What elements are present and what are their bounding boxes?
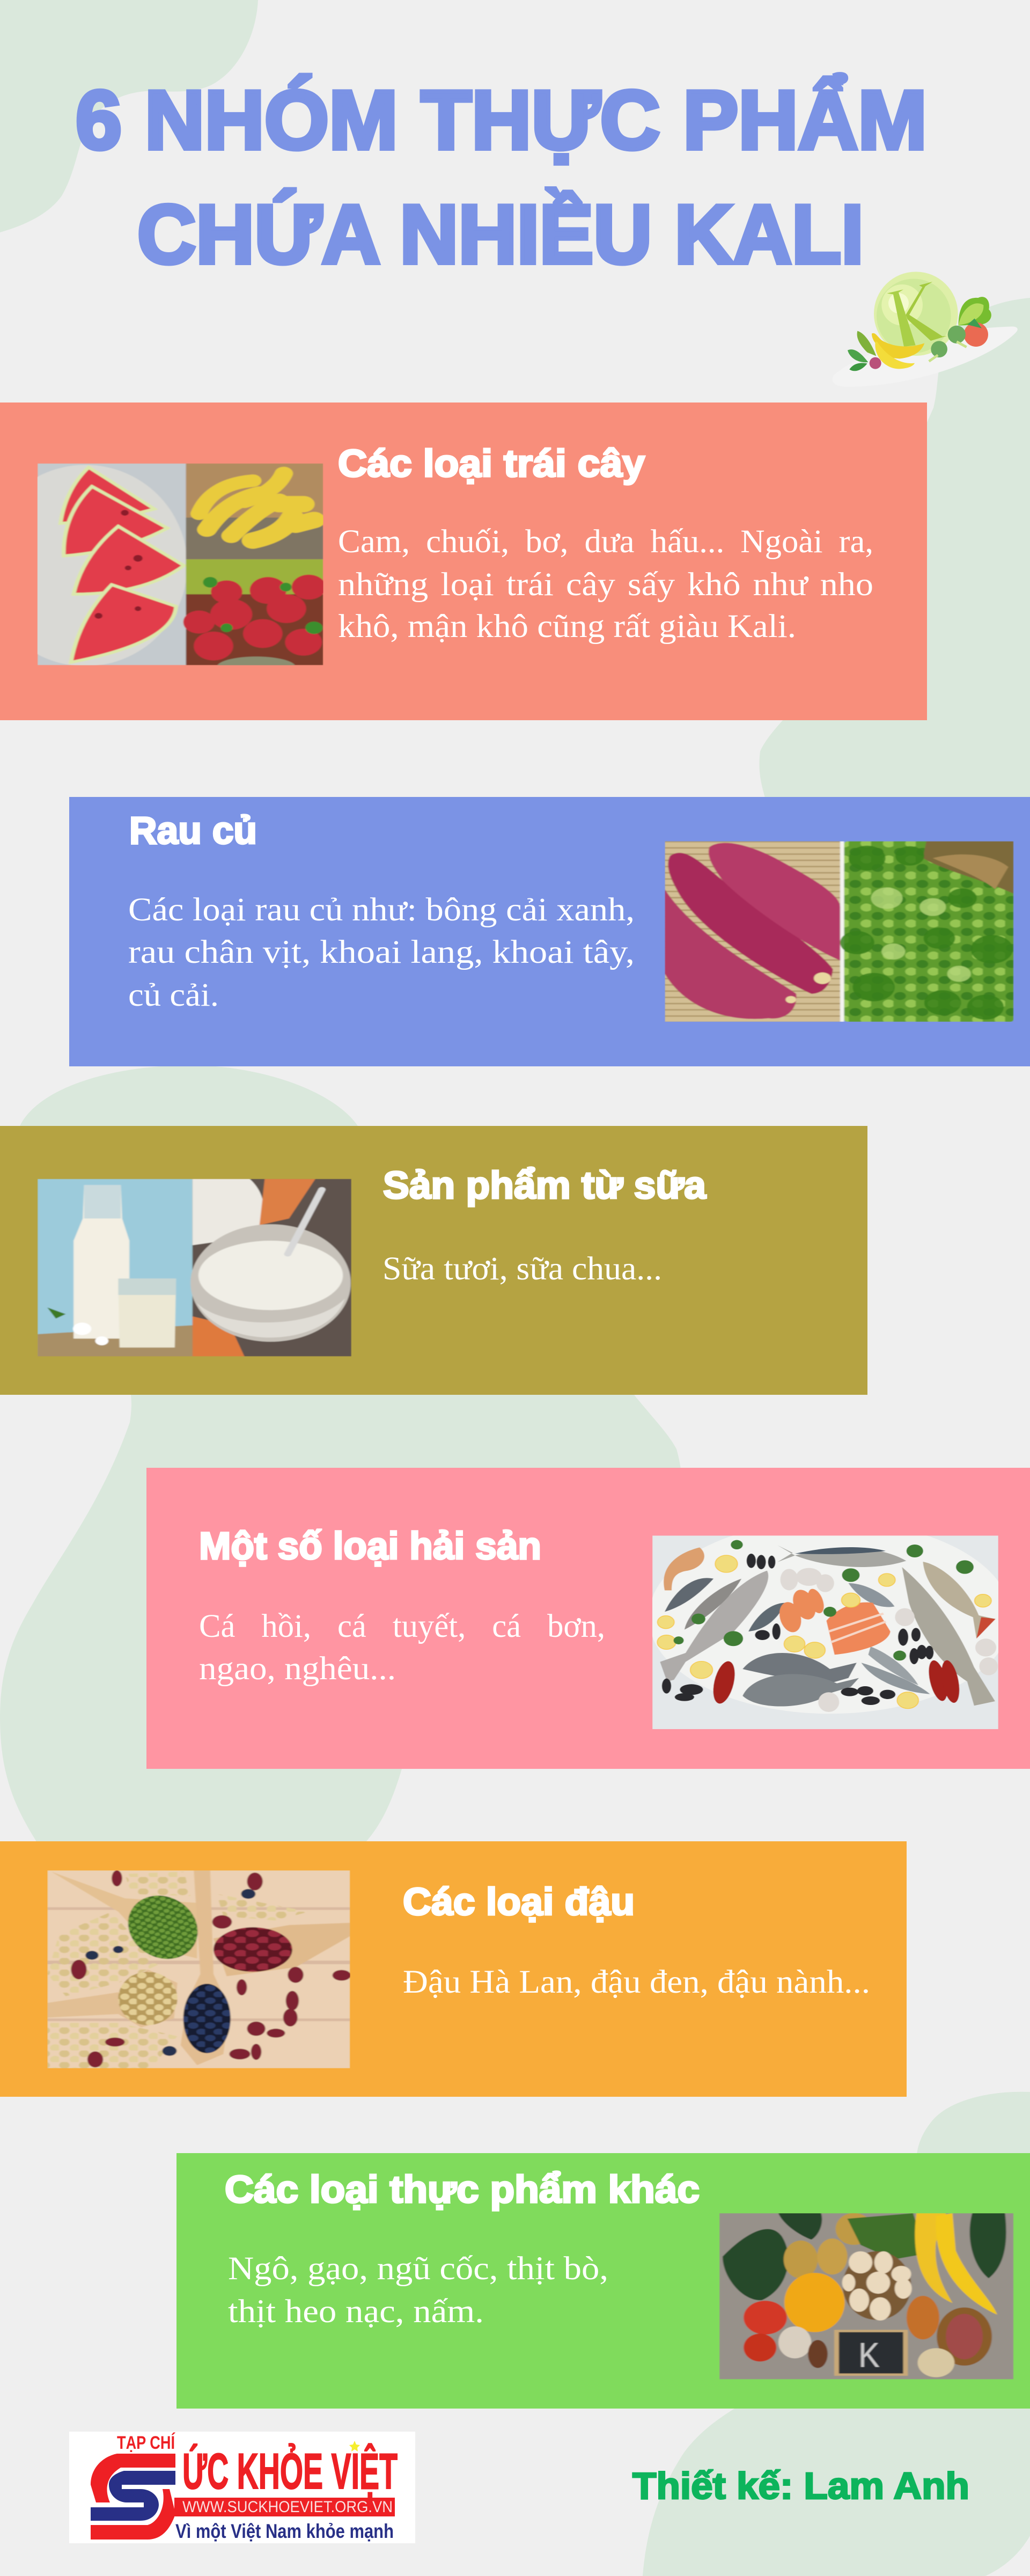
panel: other foods	[176, 2153, 1030, 2409]
photo: beans in wooden spoons	[47, 1870, 351, 2068]
designer credit: Thiết kế: Lam Anh	[632, 2465, 969, 2507]
photo: potassium-rich foods: K	[858, 2336, 880, 2375]
title	[76, 74, 927, 281]
text block: Các loại rau củ như: bông cải xanh,	[128, 892, 635, 928]
panel: dairy	[0, 1126, 867, 1395]
logo: Tạp chí Sức Khỏe Việt: TẠP CHÍ	[117, 2433, 175, 2453]
photo: watermelon, banana, strawberry	[38, 464, 323, 665]
icon: potassium ball with vegetables on a plate	[833, 272, 1018, 387]
text block: Đậu Hà Lan, đậu đen, đậu nành...	[403, 1964, 870, 2000]
logo: Tạp chí Sức Khỏe Việt: ỨC KHỎE VIỆT	[182, 2443, 398, 2499]
title: 6 NHÓM THỰC PHẨM	[76, 74, 927, 166]
text block: Cá hồi, cá tuyết, cá bơn,	[199, 1608, 605, 1644]
photo: milk and yogurt	[38, 1179, 351, 1356]
text block	[128, 892, 635, 1013]
photo: sweet potato and broccoli	[665, 841, 1013, 1022]
text block	[199, 1608, 605, 1687]
text block: thịt heo nạc, nấm.	[228, 2294, 484, 2330]
text block	[338, 524, 873, 645]
text block: rau chân vịt, khoai lang, khoai tây,	[128, 934, 635, 970]
heading: Một số loại hải sản	[199, 1525, 541, 1568]
photo: fish and seafood	[652, 1535, 998, 1729]
heading: Sản phẩm từ sữa	[383, 1165, 707, 1207]
text block: ngao, nghêu...	[199, 1651, 396, 1687]
text block: những loại trái cây sấy khô như nho	[338, 567, 873, 603]
logo: Tạp chí Sức Khỏe Việt	[69, 2432, 415, 2543]
panel: seafood	[146, 1468, 1030, 1769]
text block: khô, mận khô cũng rất giàu Kali.	[338, 609, 796, 645]
logo: Tạp chí Sức Khỏe Việt: Vì một Việt Nam khỏe mạnh	[175, 2520, 394, 2542]
text block: Cam, chuối, bơ, dưa hấu... Ngoài ra,	[338, 524, 873, 560]
logo: Tạp chí Sức Khỏe Việt: WWW.SUCKHOEVIET.ORG.VN	[182, 2498, 393, 2516]
title: CHỨA NHIỀU KALI	[137, 188, 864, 281]
text block: Sữa tươi, sữa chua...	[382, 1251, 662, 1287]
text block: củ cải.	[128, 977, 219, 1013]
panel: fruits	[0, 402, 927, 720]
panel: beans	[0, 1841, 907, 2097]
panel: vegetables	[69, 797, 1030, 1066]
heading: Các loại thực phẩm khác	[225, 2169, 700, 2211]
heading: Rau củ	[129, 810, 257, 852]
text block	[228, 2251, 608, 2330]
heading: Các loại trái cây	[338, 443, 645, 485]
photo: potassium-rich foods	[719, 2213, 1013, 2379]
heading: Các loại đậu	[403, 1881, 635, 1923]
text block: Ngô, gạo, ngũ cốc, thịt bò,	[228, 2251, 608, 2287]
